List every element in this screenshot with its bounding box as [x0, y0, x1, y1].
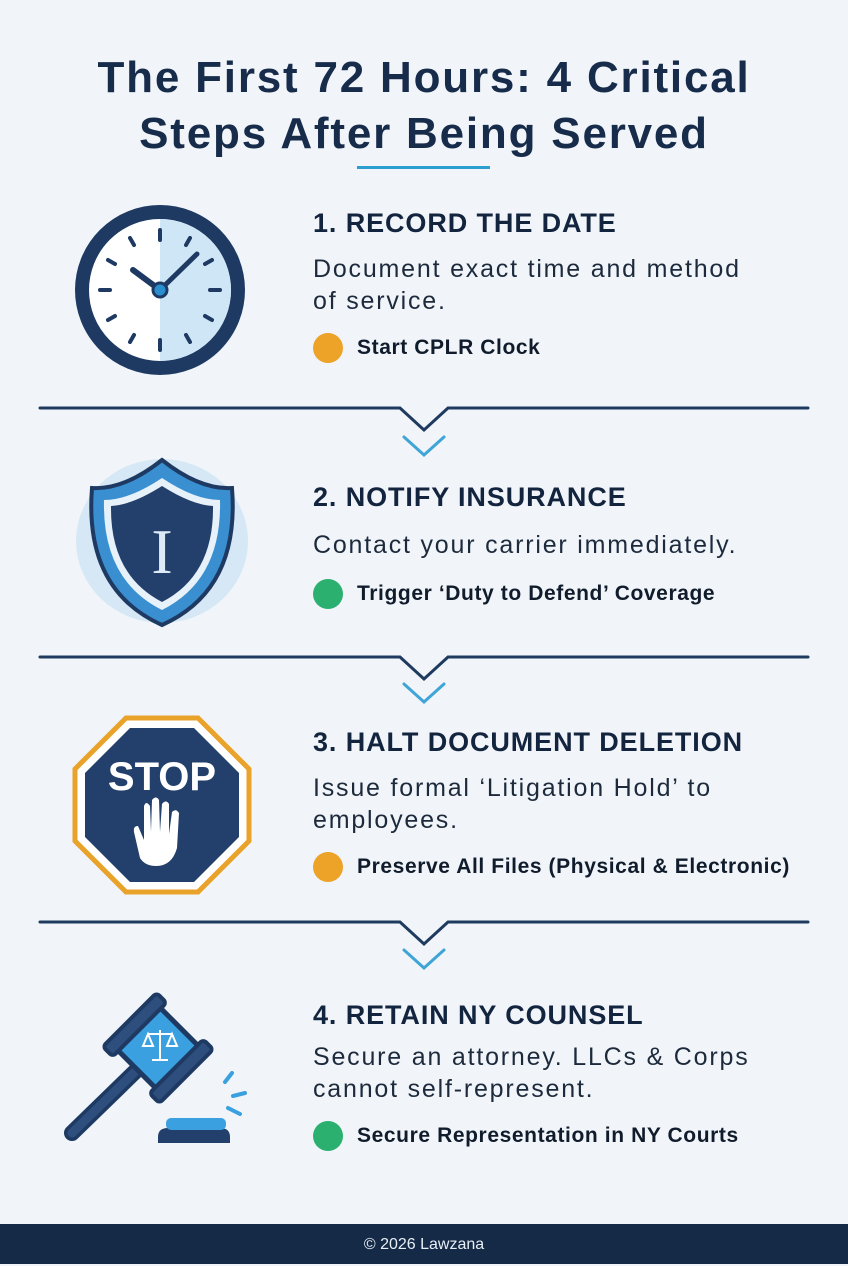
icon: shield [76, 459, 248, 625]
footer [0, 1224, 848, 1264]
step 1 badge: Start CPLR Clock [357, 336, 540, 359]
icon: shield: I [151, 516, 173, 587]
step 2 badge [313, 579, 715, 609]
title: The First 72 Hours: 4 Critical [97, 53, 751, 102]
icon: clock [82, 212, 238, 368]
step 4 badge: Secure Representation in NY Courts [357, 1124, 739, 1147]
step 3 badge [313, 852, 790, 882]
step 4 text [313, 1043, 750, 1103]
title [97, 53, 751, 158]
step 1 text: Document exact time and method [313, 255, 741, 283]
step 2 text: Contact your carrier immediately. [313, 531, 737, 559]
step 1 text [313, 255, 741, 315]
divider 1 [40, 408, 808, 455]
step 3 text: Issue formal ‘Litigation Hold’ to [313, 774, 712, 802]
step 4 text: Secure an attorney. LLCs & Corps [313, 1043, 750, 1071]
step 3 badge: Preserve All Files (Physical & Electronic) [357, 855, 790, 878]
step 4 [313, 1000, 750, 1151]
step 2 heading: 2. NOTIFY INSURANCE [313, 482, 627, 512]
step 2 badge: Trigger ‘Duty to Defend’ Coverage [357, 582, 715, 605]
step 2 [313, 482, 737, 609]
title: Steps After Being Served [139, 109, 709, 158]
step 3 text [313, 774, 712, 834]
divider 3 [40, 922, 808, 968]
title underline [357, 166, 490, 169]
icon: gavel [72, 993, 245, 1143]
step 4 heading: 4. RETAIN NY COUNSEL [313, 1000, 644, 1030]
step 1 [313, 208, 741, 363]
step 3 heading: 3. HALT DOCUMENT DELETION [313, 727, 743, 757]
icon: stop sign [75, 718, 249, 892]
step 4 text: cannot self-represent. [313, 1075, 594, 1103]
step 3 [313, 727, 790, 882]
step 1 heading: 1. RECORD THE DATE [313, 208, 617, 238]
step 1 badge [313, 333, 540, 363]
footer: © 2026 Lawzana [364, 1236, 484, 1253]
step 4 badge [313, 1121, 739, 1151]
divider 2 [40, 657, 808, 702]
icon: stop sign: STOP [108, 755, 216, 799]
step 3 text: employees. [313, 806, 459, 834]
step 1 text: of service. [313, 287, 447, 315]
